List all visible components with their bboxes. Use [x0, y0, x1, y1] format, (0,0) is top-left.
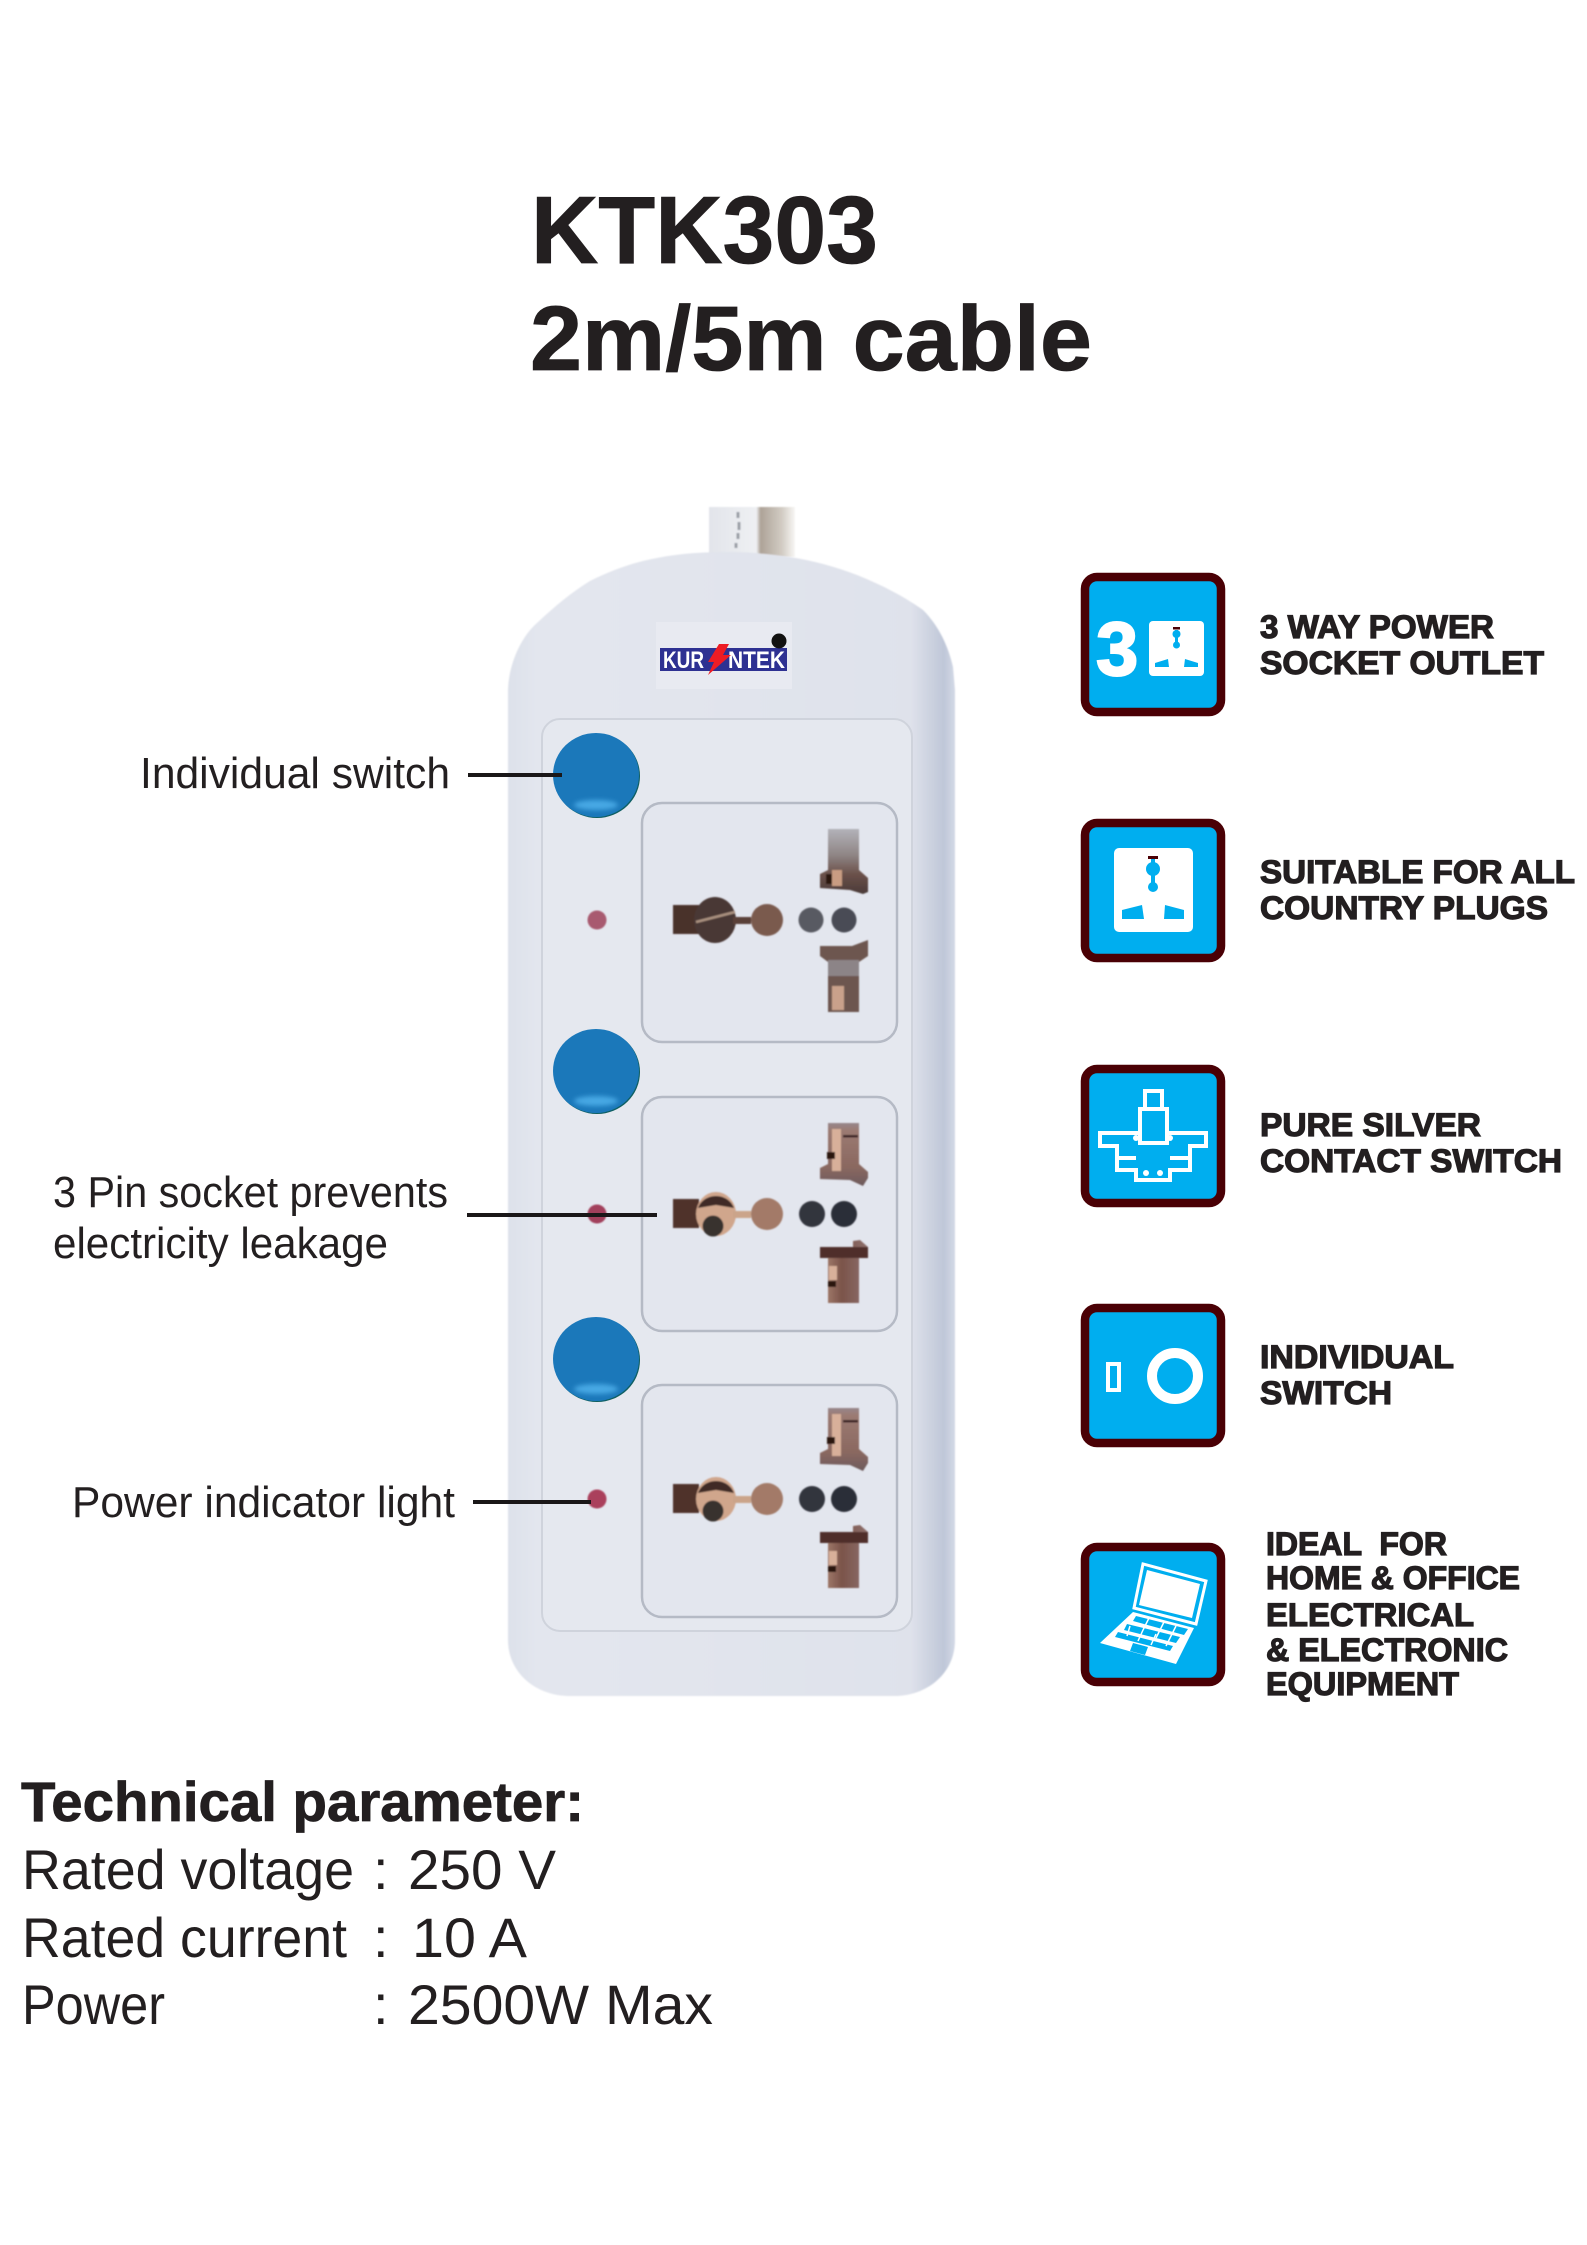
rated voltage: : [373, 1838, 389, 1901]
icon: universal socket [1085, 823, 1221, 958]
power cable [709, 507, 795, 557]
feature: pure silver contact switch [1085, 1069, 1562, 1203]
rated current: 10 A [412, 1906, 528, 1969]
indicator 3 [588, 1490, 606, 1508]
icon: switch [1085, 1308, 1221, 1443]
rated current [22, 1906, 528, 1969]
indicator 1 [588, 910, 606, 930]
heading: Technical parameter: [21, 1770, 584, 1833]
power: 2500W Max [408, 1973, 713, 2036]
rated voltage [22, 1838, 557, 1901]
socket 3 [642, 1385, 897, 1617]
switch 2 [553, 1029, 640, 1114]
callout: 3 pin socket: electricity leakage [53, 1219, 388, 1268]
feature: 3 way power socket outlet [1085, 577, 1544, 712]
feature: ideal for home and office: HOME & OFFICE [1266, 1560, 1520, 1596]
icon: 3 sockets [1085, 577, 1221, 712]
strip body [508, 552, 955, 1696]
callout: 3 pin socket [53, 1168, 657, 1268]
product: power strip [508, 507, 955, 1696]
callout: individual switch: Individual switch [140, 749, 450, 798]
feature: ideal for home and office: EQUIPMENT [1266, 1666, 1459, 1702]
logo [656, 622, 792, 689]
socket 1 [642, 803, 897, 1042]
icon: laptop [1085, 1547, 1221, 1682]
power: Power [22, 1973, 165, 2036]
feature: ideal for home and office [1085, 1526, 1520, 1702]
rated voltage: Rated voltage [22, 1838, 354, 1901]
feature: individual switch [1085, 1308, 1454, 1443]
switch 1 [553, 733, 640, 818]
power: : [373, 1973, 389, 2036]
title: 2m/5m cable [530, 288, 1092, 390]
icon: 3 sockets: 3 [1096, 607, 1138, 692]
feature: 3 way power socket outlet: 3 WAY POWER [1260, 609, 1494, 645]
feature: pure silver contact switch: PURE SILVER [1260, 1107, 1481, 1143]
rated current: Rated current [22, 1906, 347, 1969]
feature: individual switch: SWITCH [1260, 1375, 1392, 1411]
switch panel [542, 719, 912, 1631]
feature: suitable for all country plugs: COUNTRY PLUGS [1260, 890, 1548, 926]
feature: ideal for home and office: & ELECTRONIC [1266, 1632, 1508, 1668]
icon: contact switch [1085, 1069, 1221, 1203]
power [22, 1973, 713, 2036]
technical parameters [21, 1770, 713, 2036]
feature: suitable for all country plugs [1085, 823, 1575, 958]
feature: 3 way power socket outlet: SOCKET OUTLET [1260, 645, 1544, 681]
feature: ideal for home and office: IDEAL FOR [1266, 1526, 1447, 1562]
feature: ideal for home and office: ELECTRICAL [1266, 1597, 1474, 1633]
indicator 2 [588, 1204, 606, 1224]
logo: NTEK [728, 647, 786, 674]
feature: pure silver contact switch: CONTACT SWITCH [1260, 1143, 1562, 1179]
rated current: : [373, 1906, 389, 1969]
socket 2 [642, 1097, 897, 1331]
callout: 3 pin socket: 3 Pin socket prevents [53, 1168, 448, 1217]
feature: individual switch: INDIVIDUAL [1260, 1339, 1454, 1375]
title: KTK303 [531, 177, 878, 284]
callout: power indicator light: Power indicator light [72, 1478, 455, 1527]
switch 3 [553, 1317, 640, 1402]
feature: suitable for all country plugs: SUITABLE FOR ALL [1260, 854, 1575, 890]
title [530, 177, 1092, 390]
rated voltage: 250 V [408, 1838, 557, 1901]
logo: KUR [663, 647, 704, 674]
